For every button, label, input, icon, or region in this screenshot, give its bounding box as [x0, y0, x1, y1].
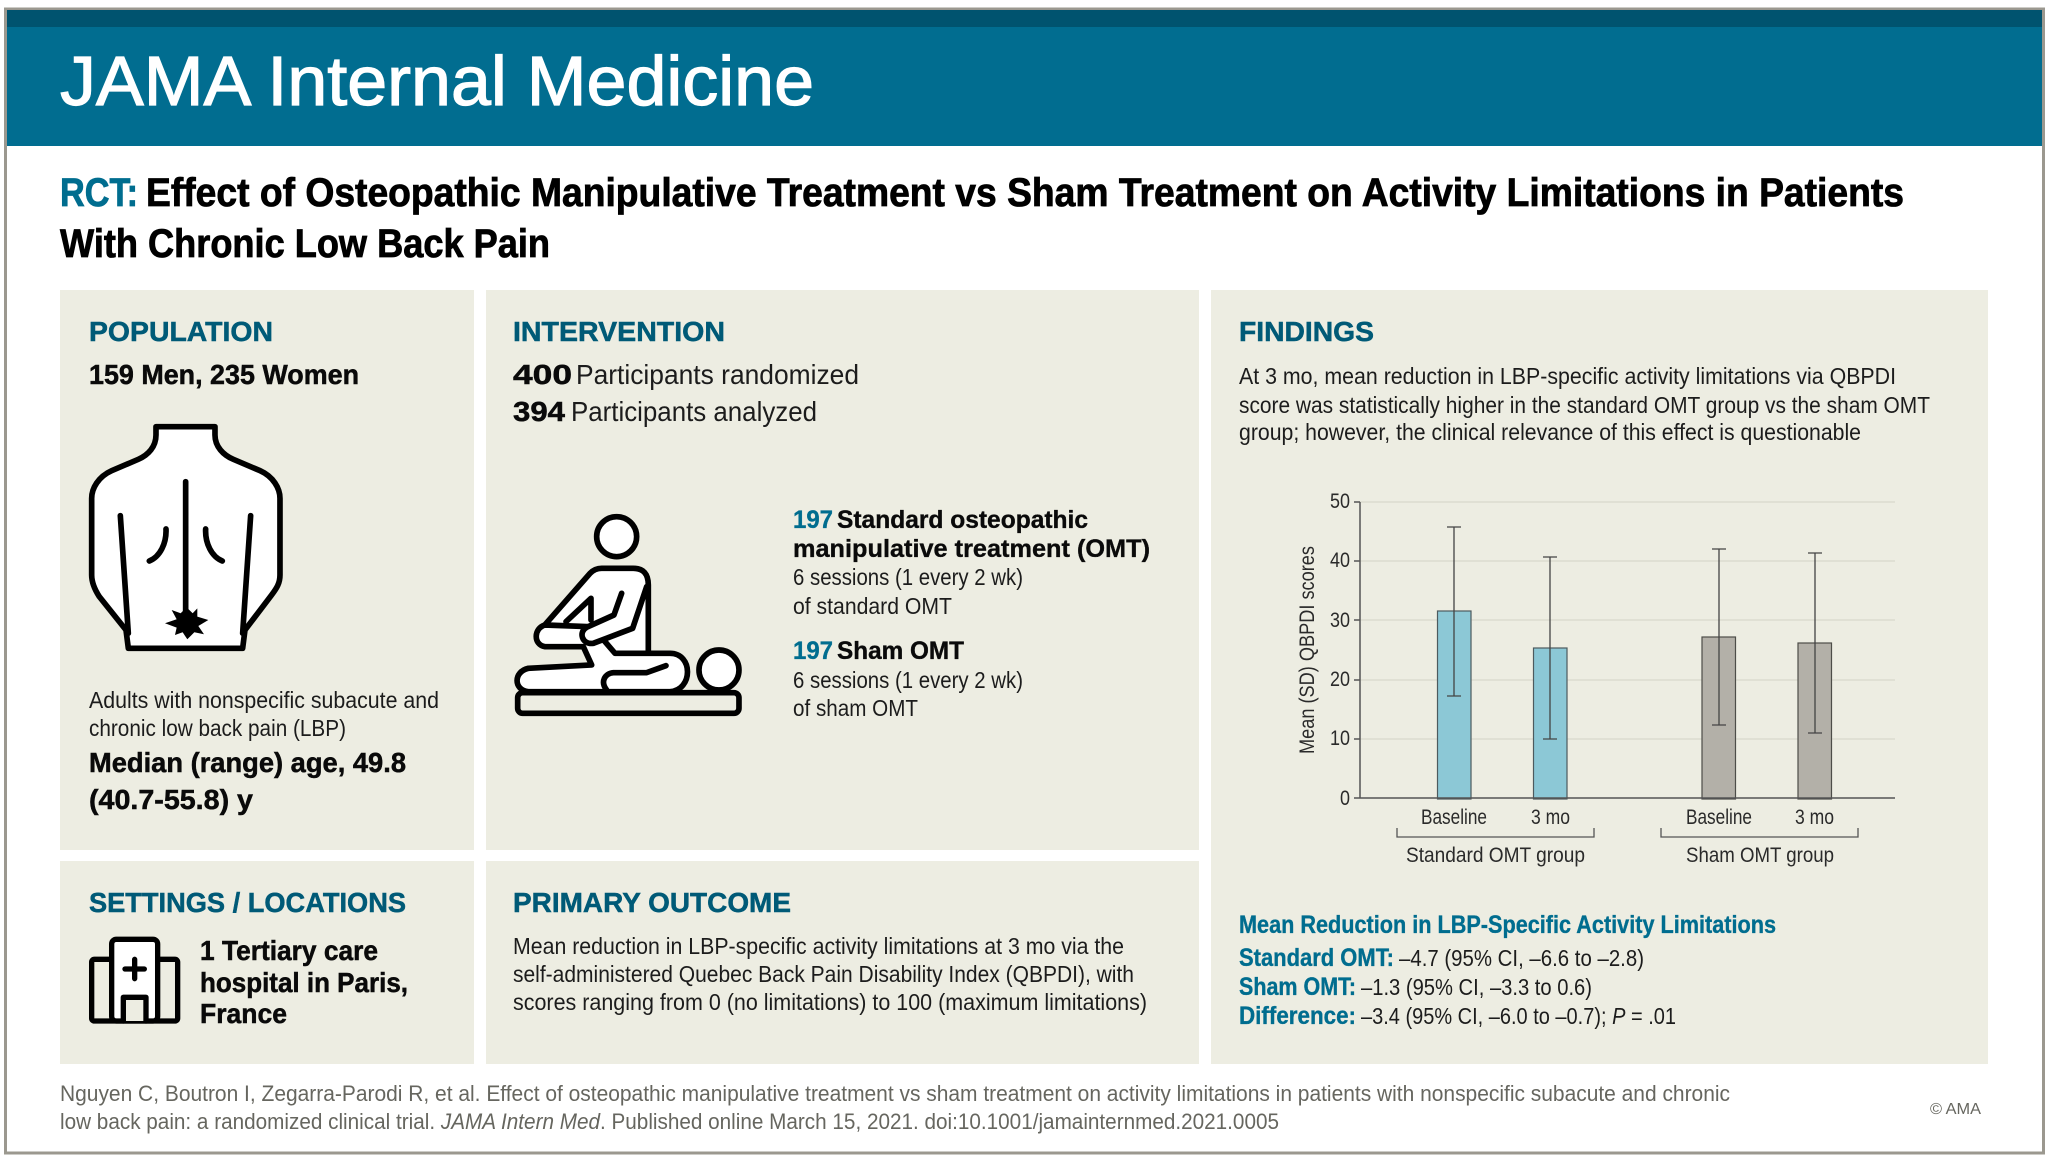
title: RCT: — [60, 171, 138, 215]
x-axis labels: Baseline — [1421, 806, 1487, 829]
primary outcome text: self-administered Quebec Back Pain Disability Index (QBPDI), with — [513, 961, 1134, 987]
y-axis tick labels: 10 — [1330, 727, 1350, 750]
setting description: hospital in Paris, — [200, 967, 408, 998]
group labels: Standard OMT group — [1406, 844, 1585, 867]
y-axis title: Mean (SD) QBPDI scores — [1296, 546, 1319, 754]
median age: Median (range) age, 49.8 — [89, 747, 406, 778]
population description: Adults with nonspecific subacute and — [89, 687, 439, 713]
findings summary: At 3 mo, mean reduction in LBP-specific activity limitations via QBPDI — [1239, 363, 1896, 389]
icon: hospital — [92, 939, 178, 1021]
findings summary: group; however, the clinical relevance of this effect is questionable — [1239, 419, 1861, 445]
header banner — [7, 10, 2042, 146]
title — [60, 171, 1904, 266]
y-axis tick labels — [1330, 490, 1350, 810]
sham OMT arm: of sham OMT — [793, 695, 918, 721]
journal name: JAMA Internal Medicine — [60, 42, 814, 120]
primary outcome text — [513, 933, 1147, 1015]
findings summary: score was statistically higher in the standard OMT group vs the sham OMT — [1239, 392, 1930, 418]
median age: (40.7-55.8) y — [89, 784, 253, 815]
standard OMT arm: Standard osteopathic — [837, 506, 1088, 534]
y-axis tick labels: 30 — [1330, 609, 1350, 632]
title: With Chronic Low Back Pain — [60, 222, 550, 266]
setting description: 1 Tertiary care — [200, 935, 378, 966]
participants randomized and analyzed — [513, 359, 859, 427]
standard OMT arm: of standard OMT — [793, 593, 952, 619]
primary outcome text: Mean reduction in LBP-specific activity limitations at 3 mo via the — [513, 933, 1124, 959]
participants randomized and analyzed: Participants analyzed — [571, 396, 817, 427]
title: Effect of Osteopathic Manipulative Treatment vs Sham Treatment on Activity Limitations in Patients — [146, 171, 1904, 215]
setting description: France — [200, 998, 287, 1029]
heading: primary outcome: PRIMARY OUTCOME — [513, 887, 791, 918]
heading: intervention: INTERVENTION — [513, 316, 725, 347]
mean reduction results: Difference: — [1239, 1002, 1356, 1030]
median age — [89, 747, 406, 815]
sham OMT arm — [793, 637, 1023, 721]
sham OMT arm: Sham OMT — [837, 637, 964, 665]
group labels — [1406, 844, 1834, 867]
bar: sham baseline — [1702, 637, 1736, 799]
standard OMT arm: manipulative treatment (OMT) — [793, 535, 1150, 563]
primary outcome text: scores ranging from 0 (no limitations) to 100 (maximum limitations) — [513, 989, 1147, 1015]
axes — [1354, 502, 1895, 798]
standard OMT arm: 6 sessions (1 every 2 wk) — [793, 564, 1023, 590]
panel: settings / locations — [60, 861, 474, 1064]
mean reduction results: Mean Reduction in LBP-Specific Activity Limitations — [1239, 911, 1776, 939]
sham OMT arm: 197 — [793, 637, 833, 665]
icon: back with lumbar pain — [92, 427, 280, 648]
panel: intervention — [486, 290, 1199, 850]
population description: chronic low back pain (LBP) — [89, 715, 346, 741]
panel: population — [60, 290, 474, 850]
x-axis labels: Baseline — [1686, 806, 1752, 829]
population description — [89, 687, 439, 741]
error bars — [1447, 527, 1822, 739]
y-axis tick labels: 50 — [1330, 490, 1350, 513]
mean reduction results: –3.4 (95% CI, –6.0 to –0.7); P = .01 — [1361, 1003, 1676, 1029]
setting description — [200, 935, 408, 1029]
standard OMT arm — [793, 506, 1150, 619]
citation: Nguyen C, Boutron I, Zegarra-Parodi R, et al. Effect of osteopathic manipulative treatment vs sham treatment on activity limitations in patients with nonspecific subacute and chronic — [60, 1081, 1730, 1106]
mean reduction results: Sham OMT: — [1239, 973, 1356, 1001]
mean reduction results — [1239, 911, 1776, 1030]
citation: low back pain: a randomized clinical trial. JAMA Intern Med. Published online March 15, 2021. doi:10.1001/jamainternmed.2021.0005 — [60, 1109, 1279, 1134]
group labels: Sham OMT group — [1686, 844, 1834, 867]
panel: primary outcome — [486, 861, 1199, 1064]
participants randomized and analyzed: 394 — [513, 396, 565, 427]
participant counts: 159 Men, 235 Women — [89, 359, 359, 390]
mean reduction results: –1.3 (95% CI, –3.3 to 0.6) — [1361, 974, 1592, 1000]
participants randomized and analyzed: Participants randomized — [576, 359, 859, 390]
x-axis labels — [1421, 806, 1834, 829]
icon: osteopathic treatment — [517, 517, 739, 713]
heading: settings: SETTINGS / LOCATIONS — [89, 887, 406, 918]
bar: standard 3 mo — [1534, 648, 1567, 799]
y-axis tick labels: 20 — [1330, 668, 1350, 691]
heading: population: POPULATION — [89, 316, 273, 347]
mean reduction results: Standard OMT: — [1239, 944, 1394, 972]
standard OMT arm: 197 — [793, 506, 833, 534]
y-axis tick labels: 0 — [1340, 787, 1350, 810]
x-axis labels: 3 mo — [1795, 806, 1834, 829]
participants randomized and analyzed: 400 — [513, 359, 572, 390]
y-axis tick labels: 40 — [1330, 549, 1350, 572]
heading: findings: FINDINGS — [1239, 316, 1374, 347]
findings summary — [1239, 363, 1930, 445]
mean reduction results: –4.7 (95% CI, –6.6 to –2.8) — [1399, 945, 1644, 971]
bar chart — [1296, 490, 1895, 867]
panel: findings — [1211, 290, 1988, 1064]
group brackets — [1397, 828, 1858, 837]
sham OMT arm: 6 sessions (1 every 2 wk) — [793, 667, 1023, 693]
bar: sham 3 mo — [1798, 643, 1832, 799]
bar: standard baseline — [1438, 611, 1471, 799]
copyright: © AMA — [1930, 1101, 1981, 1118]
citation — [60, 1081, 1730, 1134]
x-axis labels: 3 mo — [1531, 806, 1570, 829]
